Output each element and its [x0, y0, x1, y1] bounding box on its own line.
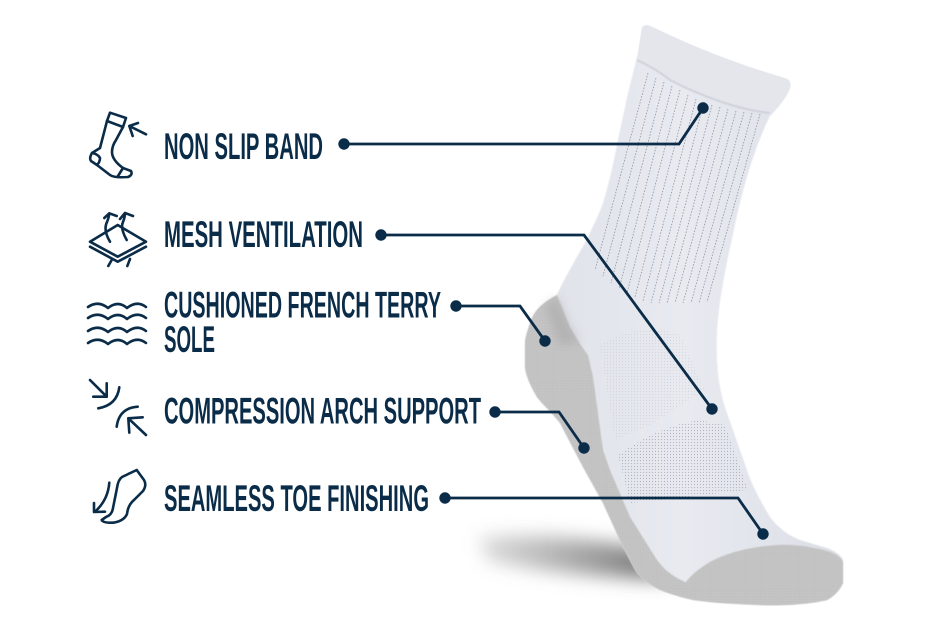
callout line: toe finishing	[439, 492, 769, 540]
label: mesh ventilation: MESH VENTILATION	[164, 214, 363, 255]
callout line: mesh ventilation	[375, 229, 718, 415]
heel shading	[545, 297, 580, 345]
cuff band	[637, 25, 790, 113]
label: cushioned french terry sole: SOLE	[164, 319, 215, 360]
leg ribs	[595, 73, 760, 303]
callout line: non slip band	[338, 102, 709, 150]
sock illustration	[525, 25, 843, 605]
icon: compression arrows	[90, 380, 146, 435]
icon: foot with arrow	[94, 470, 145, 523]
cuff seam	[637, 60, 770, 113]
icon: mesh layers with airflow	[90, 213, 146, 266]
upper foot mesh	[600, 329, 705, 440]
label: compression arch support: COMPRESSION ARCH SUPPORT	[164, 390, 481, 432]
toe patch	[683, 545, 843, 605]
floor shadow	[478, 536, 670, 580]
icon: terry waves	[88, 304, 146, 344]
icon: sock with arrow	[90, 113, 146, 177]
sock body	[525, 25, 843, 605]
label: cushioned french terry sole: CUSHIONED FRENCH TERRY	[164, 284, 441, 326]
sole and heel patch	[525, 295, 693, 600]
label: seamless toe finishing: SEAMLESS TOE FINISHING	[164, 478, 429, 519]
label: cushioned french terry sole	[164, 284, 441, 360]
instep mesh	[618, 420, 748, 503]
label: non slip band: NON SLIP BAND	[164, 126, 323, 167]
callout line: arch support	[489, 406, 590, 454]
callout line: cushioned sole	[450, 300, 551, 347]
